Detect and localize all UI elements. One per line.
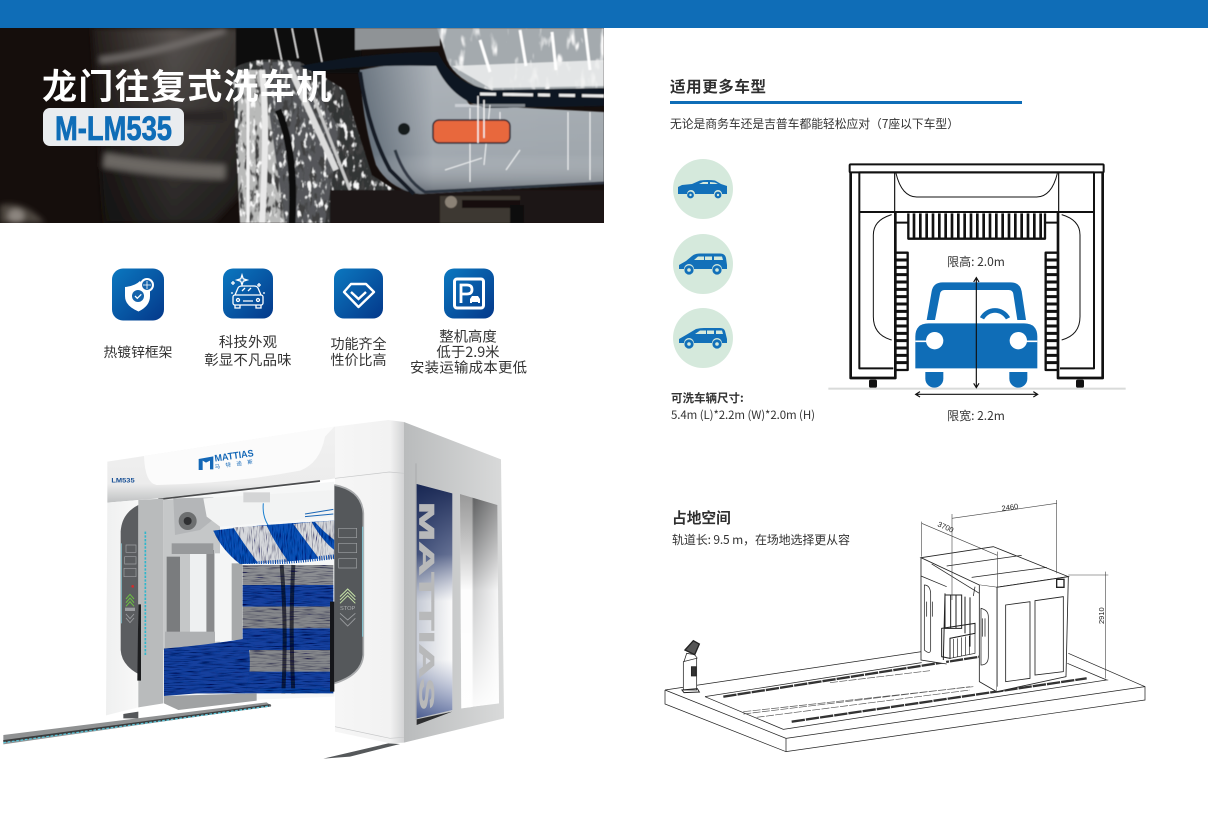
feature: galvanized frame [104,268,173,361]
feature: low height: 低于2.9米 [436,341,500,362]
feature: low height [410,268,527,378]
right column [330,420,404,743]
kiosk [682,641,699,693]
model mark: LM535 [111,478,135,484]
washable vehicle size [671,390,815,423]
feature: full functions: 功能齐全 [330,334,386,354]
platform [665,652,1145,752]
feature: full functions: 性价比高 [330,350,386,370]
brand logo: MATTIAS [214,448,255,465]
feature: tech look: 彰显不凡品味 [204,349,292,370]
feature: low height: 安装运输成本更低 [410,356,527,378]
icon: shield [112,268,164,320]
washable vehicle size: 5.4m (L)*2.2m (W)*2.0m (H) [671,407,815,423]
icon: diamond [334,268,383,318]
top blue band [0,0,1208,28]
feature: galvanized frame: 热镀锌框架 [104,341,173,361]
feature: tech look [204,268,292,370]
right column: STOP [340,606,356,612]
dimension label 2910: 2910 [1097,607,1106,624]
dimensions [922,500,1108,687]
description: track length: 轨道长: 9.5 m，在场地选择更从容 [672,531,850,548]
side panel [404,422,504,743]
dimension label 2460: 2460 [1001,502,1019,513]
feature: tech look: 科技外观 [219,331,277,352]
icon: parking [444,268,494,318]
interior [163,482,334,703]
height limit label: 限高: 2.0m [947,253,1005,270]
dimension label 3700: 3700 [936,520,955,535]
top brush [213,521,334,564]
feature: full functions [330,268,386,370]
description: car types: 无论是商务车还是吉普车都能轻松应对（7座以下车型） [670,115,959,132]
icon: mpv [673,308,733,368]
model badge: M-LM535 [55,110,172,148]
top beam [107,427,335,503]
left column [106,499,163,718]
brand logo [199,448,259,471]
brand logo: 马特迪斯 [214,457,259,471]
vertical brush [243,565,333,693]
washable vehicle size: 可洗车辆尺寸: [671,390,744,406]
car front [915,282,1037,388]
machine [921,547,1068,692]
icon: sparkling car [223,268,273,318]
icon: sedan [673,159,733,219]
hero photo: car being washed [0,28,604,225]
car type icons [673,159,733,368]
gantry front-view diagram [828,164,1126,397]
width arrow [916,392,1038,397]
side brush rungs [895,260,907,363]
icon: suv [673,234,733,294]
heading: more car types [670,75,1022,104]
rail left [3,702,400,759]
vertical brand text on side: MATTIAS [414,502,438,710]
feature: low height: 整机高度 [439,326,497,346]
height arrow [974,278,979,388]
title: 龙门往复式洗车机 [42,59,331,110]
car wash machine illustration [3,420,504,759]
bottom brush [164,638,333,696]
heading: more car types: 适用更多车型 [670,75,766,97]
rails [723,657,1087,722]
isometric footprint drawing [665,500,1145,752]
heading: footprint: 占地空间 [672,507,731,528]
brush bars top [914,213,1041,239]
width limit label: 限宽: 2.2m [947,407,1005,424]
